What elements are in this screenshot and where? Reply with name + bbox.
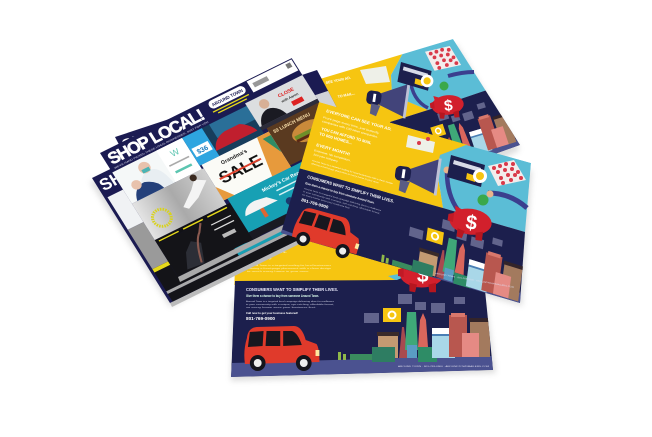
headline text [246,287,338,321]
navy panel copy [301,174,395,215]
tablet [397,62,433,91]
yellow panel copy: offering a front-page placement with a clean design [247,267,331,270]
ad: car wash: $36 [196,145,210,156]
pins map [425,46,461,71]
car [290,204,366,262]
ad: sale: SALE [215,151,266,187]
car [244,326,319,371]
navy panel copy: 801-769-0900 [301,197,330,210]
ad: dancer [157,207,253,277]
headline text: Call now to get your business featured! [246,311,298,315]
ad: realtor: CLOSE [277,86,296,99]
yellow panel copy: Just your company. [237,255,272,260]
yellow panel copy: companies with 130 other companies. [322,119,379,139]
teal panel [437,145,531,232]
city skyline [338,294,491,362]
arm [410,78,428,108]
ad: lunch menu: $9 LUNCH MENU [272,112,312,135]
back text [325,76,356,99]
catalog: front [100,58,372,282]
back text: TO MAIL... [337,91,356,99]
postcard: middle front [280,102,531,306]
footer contact: AROUND TOWN · 801-769-0900 · AROUNDTOWNMAILERS.COM [435,272,515,289]
coin [478,194,488,206]
ad: dance studio [132,168,226,240]
ad: dentist [112,138,202,204]
piggy bank [445,205,493,242]
Around Town badge [207,85,251,115]
page edge [178,182,372,282]
headline text: Give them a chance to buy from someone Around Town. [246,294,319,298]
ad: sale [201,132,291,200]
yellow panel copy: THI [282,242,288,247]
yellow panel copy: EVERY MONTH! [316,142,351,157]
ad: realtor [245,75,317,127]
piggy bank peek [398,268,442,292]
Around Town badge: AROUND TOWN [211,88,244,107]
navy panel copy: Give them a chance to buy from someone Around Town. [305,181,375,205]
arms [447,172,527,210]
headline text: CONSUMERS WANT TO SIMPLIFY THEIR LIVES. [246,287,338,292]
catalog: third [92,84,368,307]
headline text: Around Town is a targeted local campaign delivering direct to mailboxes [246,300,334,303]
map [360,66,390,84]
pins map [488,160,526,186]
shadow under the mailers [90,44,532,381]
ad: sale: Grandma's [220,149,249,166]
catalog: third: SHOP LOCAL! [96,127,210,195]
SHOP LOCAL heading: SHOP LOCAL! [104,105,208,168]
yellow panel copy: Around Town is a targeted mailing for local businesses with a clean design [312,159,393,185]
catalog: second: SHOP LOCAL! [119,101,238,154]
yellow panel copy: YOU CAN AFFORD TO MAIL [321,126,373,145]
ad: dentist: W [168,146,182,159]
mailing label [247,59,298,93]
ad: auto repair: Mickey's Car Repair [261,168,307,194]
yellow panel copy: TO 000 HOMES... [319,131,353,145]
ad: realtor: with Aaron [280,92,299,104]
ad: auto repair [227,141,365,232]
ad: car wash [182,106,264,166]
road band [231,356,493,377]
headline text: 801-769-0900 [246,316,276,321]
navy panel copy: in your community with a unique, eye-catching, affordable format, [303,190,381,215]
headline text: in your community with a unique, eye-catching, affordable format, [246,303,335,306]
yellow panel copy: Exclusive. No competitors. [314,148,352,163]
yellow panel copy [311,108,393,185]
tablet [447,155,487,187]
postcard: bottom flat [225,235,500,377]
footer contact: AROUND TOWN · 801-769-0900 · AROUNDTOWNMAILERS.COM [398,365,489,368]
map [406,135,435,153]
yellow panel copy: Front-page every time, just butterfly [323,115,381,135]
back text: SEE YOUR AD. [325,76,351,85]
yellow strip [155,203,233,244]
catalog: front: WE'VE HAND PICKED THESE LOCAL BUSINESSES, JUST FOR YOU [113,120,210,170]
megaphone [393,153,442,198]
yellow panel copy: Just your company. [313,152,339,163]
yellow panel copy: Around Town is a targeted mailing for local businesses [247,264,331,267]
navy panel copy: CONSUMERS WANT TO SIMPLIFY THEIR LIVES. [307,174,395,204]
yellow panel copy [237,242,331,273]
ad: lunch menu [267,102,343,165]
yellow panel copy: ...to your competitors. [237,249,287,254]
yellow panel copy: to reach every home in your area. [247,270,310,273]
piggy bank [429,93,465,120]
navy panel copy: so every home sees your business first. [302,193,351,210]
navy panel [281,168,525,303]
coin [440,82,448,90]
yellow panel copy: offering a front-page placement to every home in your area [311,162,379,184]
yellow panel [298,102,468,208]
road band [280,229,522,304]
megaphone [364,78,410,120]
yellow panel copy: EVERYONE CAN SEE YOUR AD. [326,108,392,132]
headline text: so every home sees your business first. [246,306,317,309]
city skyline [426,102,516,158]
postcard: back rotated [322,39,520,192]
city skyline [381,219,523,302]
hands [444,166,494,198]
navy panel copy: Around Town is a targeted local campaign delivering direct to mailboxes [304,187,382,212]
catalog: second [115,70,384,264]
